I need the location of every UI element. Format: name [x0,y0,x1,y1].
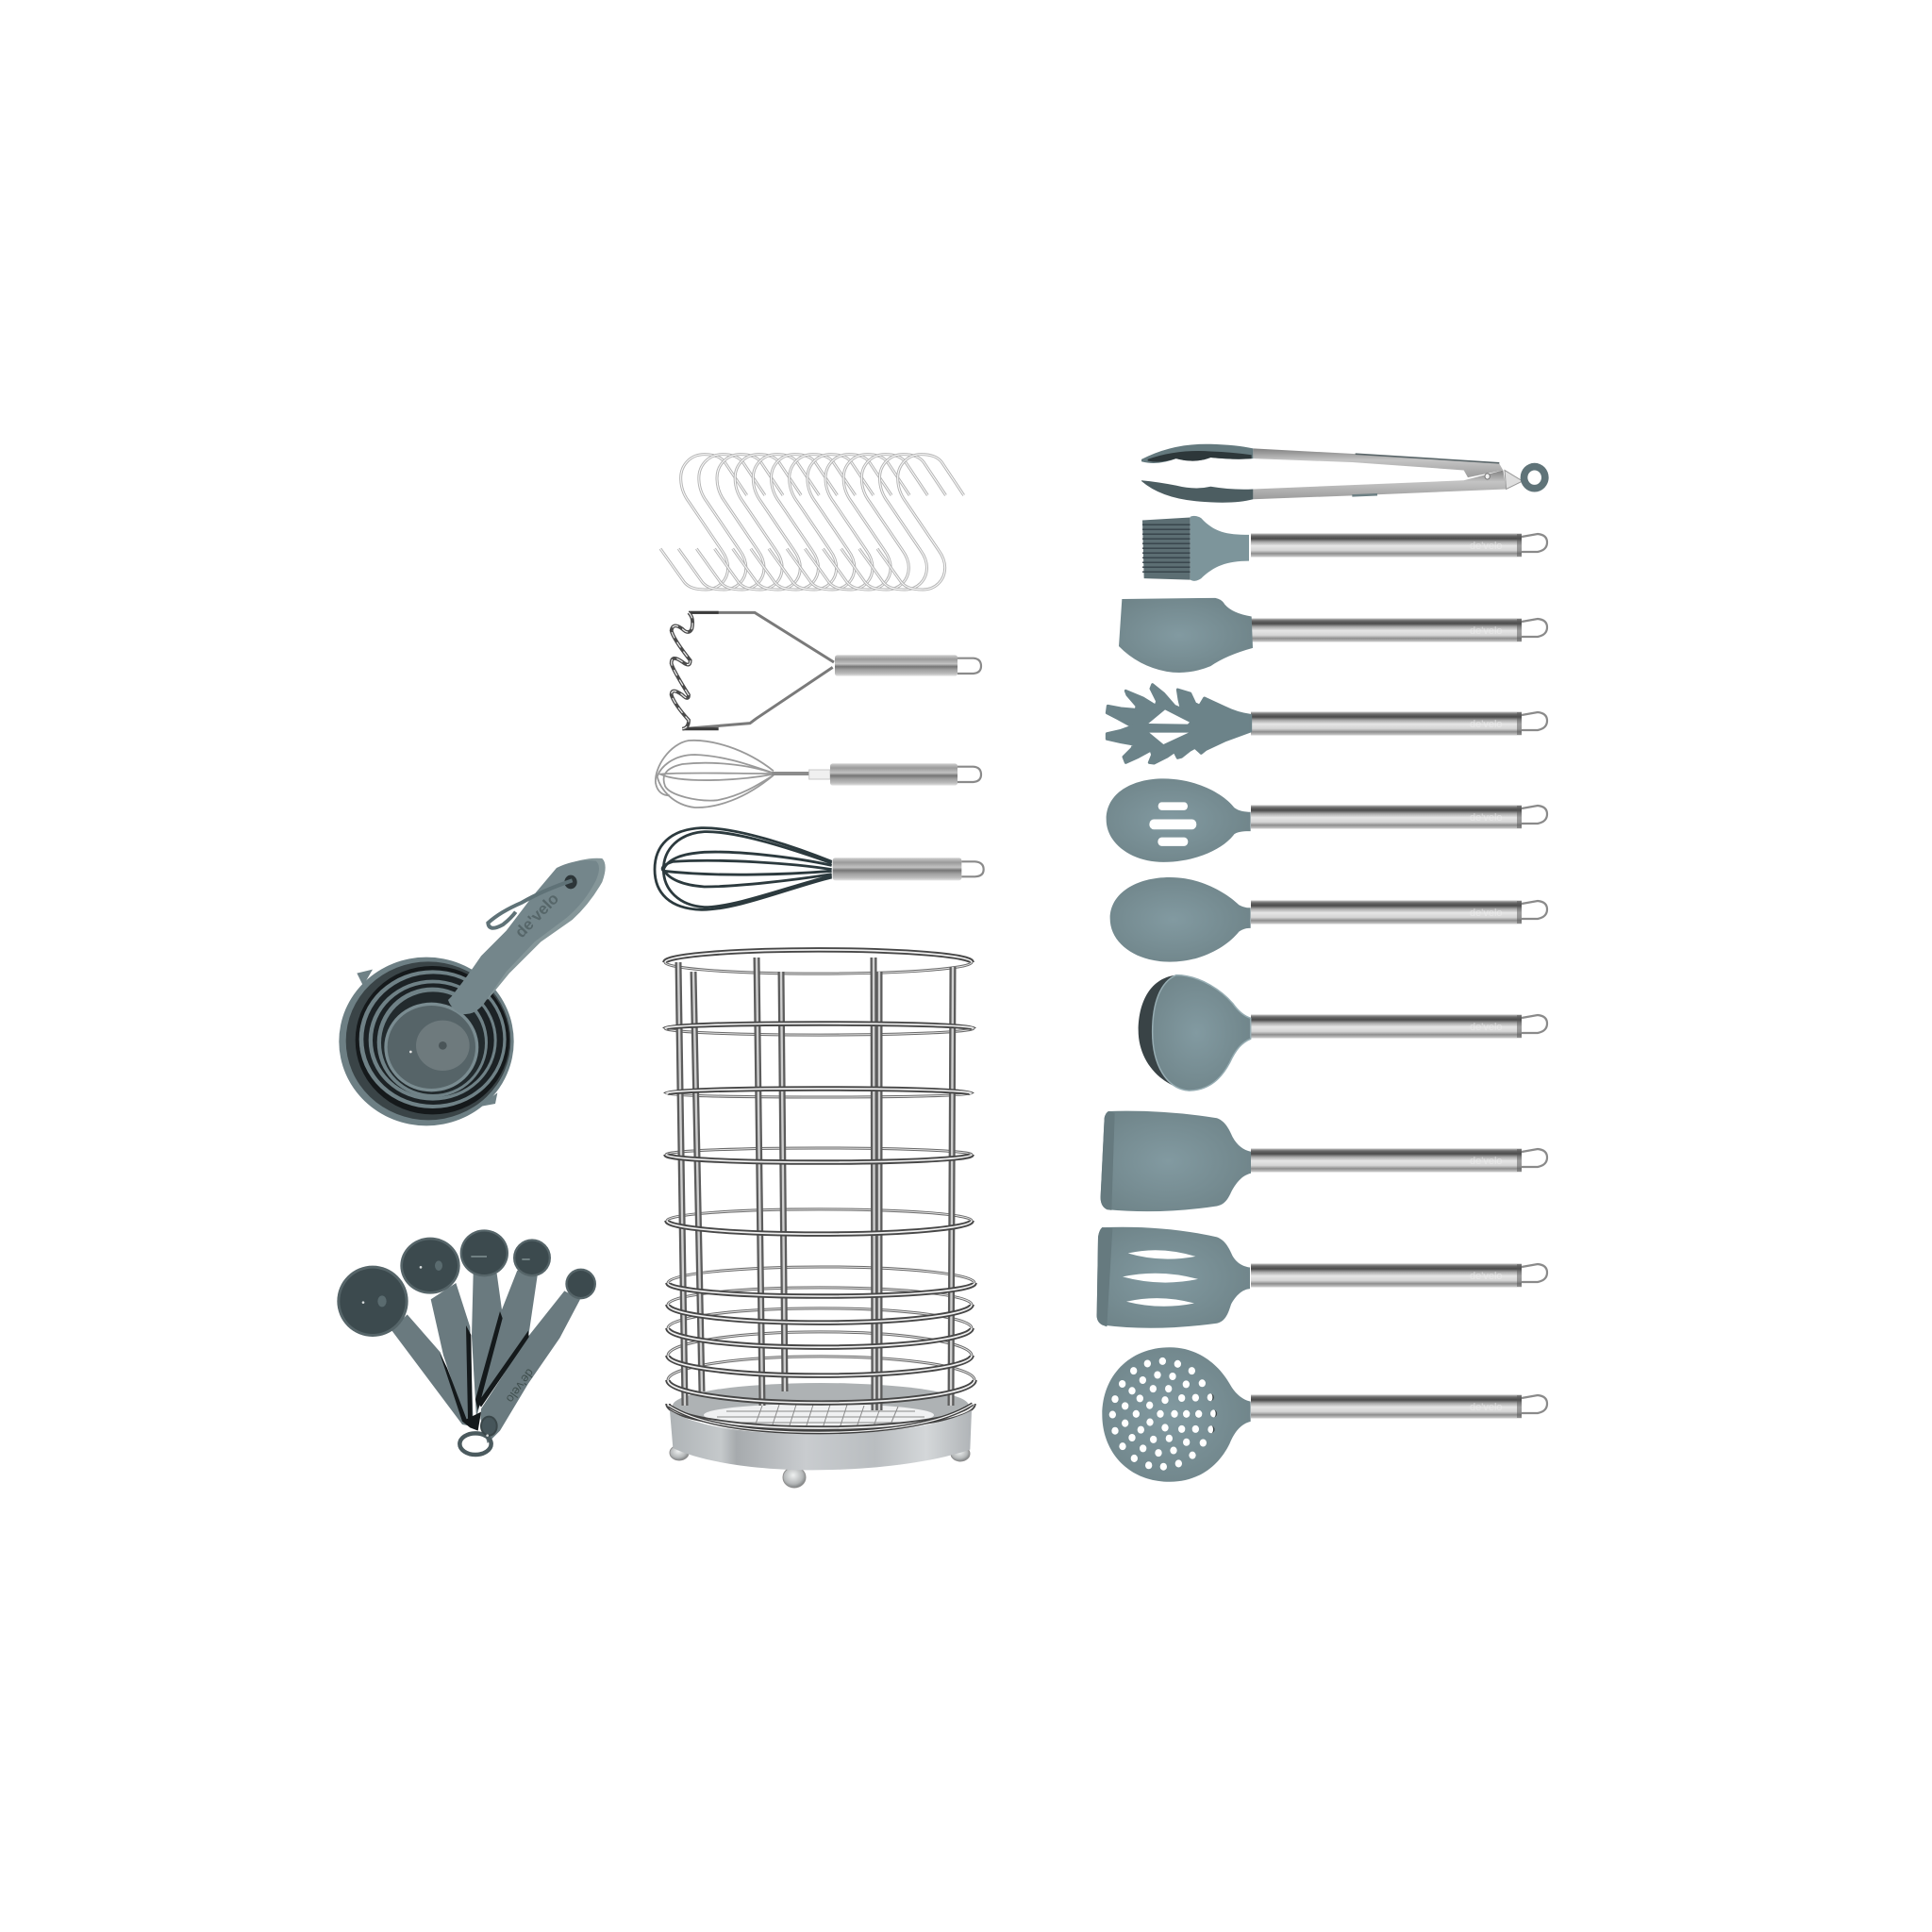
rear ring arcs [665,962,974,1380]
wire posts [678,958,953,1410]
second cup [359,970,507,1108]
spoon 4 [478,1239,551,1408]
front ring arcs [665,950,974,1428]
wire utensil holder [665,950,974,1488]
nested measuring cups [339,858,606,1125]
potato masher [672,612,981,729]
solid spoon [1110,877,1547,962]
tong heads [1141,444,1253,463]
skimmer [1102,1347,1547,1482]
holder feet [670,1445,970,1488]
spatula [1119,598,1547,673]
s-hooks [660,455,964,590]
slotted turner [1097,1227,1547,1328]
spatula: de'velo [1470,625,1503,637]
brush head [1191,516,1249,581]
tongs [1141,444,1549,503]
basting brush: de'velo [1470,541,1503,552]
fourth cup [377,988,488,1097]
ladle back [1139,975,1189,1091]
holder base band [669,1404,973,1470]
skimmer: de'velo [1470,1402,1503,1413]
ladle [1139,975,1547,1091]
silver whisk [656,741,981,808]
bristles [1142,517,1191,580]
dark gaps between spoon handles [440,1311,529,1431]
smallest cup [384,1003,478,1091]
spoon 5 [480,1269,596,1443]
holder mesh [704,1404,934,1428]
ladle bowl [1153,975,1251,1091]
slotted spoon: de'velo [1470,812,1503,824]
solid turner: de'velo [1470,1156,1503,1167]
solid turner [1101,1111,1547,1211]
slotted turner: de'velo [1470,1271,1503,1282]
ladle: de'velo [1470,1022,1503,1033]
spoon handle brand: de'velo [504,1366,538,1406]
spoon 3 [460,1229,508,1418]
slotted spoon [1107,778,1547,862]
spoon 2 [400,1238,474,1424]
cup spouts [357,970,497,1107]
pasta server [1107,685,1547,763]
solid spoon: de'velo [1470,908,1503,919]
skimmer holes [1109,1357,1217,1471]
cup handle brand: de'velo [511,890,562,941]
holder tray [673,1383,969,1428]
stacked cup handle [448,858,606,1014]
spoon key ring [459,1417,497,1455]
pasta server: de'velo [1470,719,1503,730]
third cup [369,980,497,1101]
tong arms [1253,448,1503,477]
tong pivot [1505,470,1523,489]
tong ring [1521,463,1549,492]
black silicone whisk [655,828,984,909]
largest cup [339,958,514,1125]
measuring spoons [337,1229,596,1455]
basting brush [1142,516,1547,581]
spoon 1 [337,1266,470,1426]
